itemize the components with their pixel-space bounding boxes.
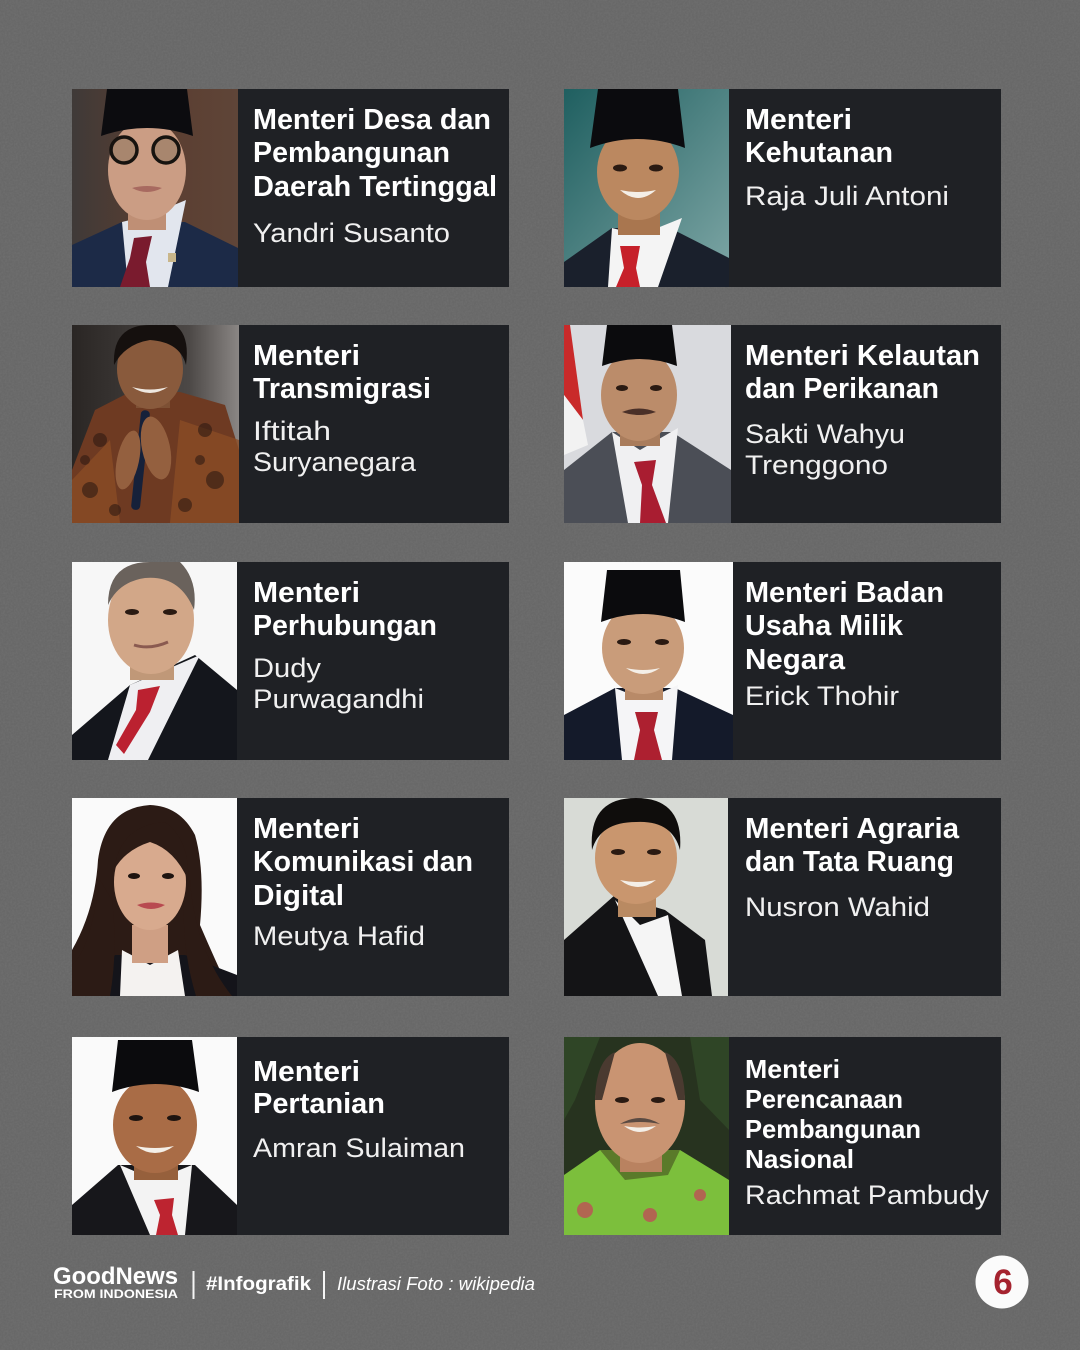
name: Amran Sulaiman	[253, 1133, 465, 1163]
heading: dan Tata Ruang	[745, 846, 954, 878]
heading	[253, 577, 437, 642]
name: Dudy	[253, 653, 322, 683]
heading	[745, 104, 893, 169]
logo: GoodNews from Indonesia: FROM INDONESIA	[54, 1287, 178, 1301]
heading: Menteri	[745, 1054, 840, 1084]
photo credit: Ilustrasi Foto : wikipedia	[337, 1274, 535, 1294]
heading	[253, 813, 473, 912]
heading	[253, 1056, 385, 1120]
heading: Kehutanan	[745, 137, 893, 169]
portrait: Raja Juli Antoni	[564, 89, 729, 287]
name: Sakti Wahyu	[745, 419, 905, 449]
hashtag: #Infografik	[206, 1274, 311, 1295]
heading: Menteri	[253, 1056, 360, 1088]
name: Iftitah	[253, 416, 331, 446]
card: Menteri Badan Usaha Milik Negara	[564, 562, 1001, 760]
name: Trenggono	[745, 450, 888, 480]
name: Erick Thohir	[745, 681, 899, 711]
name: Meutya Hafid	[253, 921, 425, 951]
portrait: Erick Thohir	[564, 562, 733, 760]
name: Nusron Wahid	[745, 892, 930, 922]
heading: Digital	[253, 880, 344, 912]
portrait: Sakti Wahyu Trenggono	[564, 325, 731, 523]
card: Menteri Komunikasi dan Digital	[72, 798, 509, 996]
heading: Menteri	[253, 340, 360, 372]
card: Menteri Perencanaan Pembangunan Nasional	[564, 1037, 1001, 1235]
heading: Menteri	[253, 813, 360, 845]
card: Menteri Perhubungan	[72, 562, 509, 760]
logo: GoodNews from Indonesia: GoodNews	[53, 1263, 178, 1290]
heading: Komunikasi dan	[253, 846, 473, 878]
heading: Daerah Tertinggal	[253, 171, 497, 203]
name	[745, 419, 905, 480]
heading: Perencanaan	[745, 1084, 903, 1114]
card: Menteri Agraria dan Tata Ruang	[564, 798, 1001, 996]
heading	[745, 813, 960, 878]
heading: Menteri Agraria	[745, 813, 960, 845]
heading	[253, 104, 497, 203]
heading: Negara	[745, 644, 846, 676]
name: Yandri Susanto	[253, 218, 450, 248]
name: Purwagandhi	[253, 684, 424, 714]
heading: Menteri	[253, 577, 360, 609]
heading: Menteri Desa dan	[253, 104, 491, 136]
heading: Usaha Milik	[745, 610, 904, 642]
card: Menteri Kehutanan	[564, 89, 1001, 287]
portrait: Amran Sulaiman	[72, 1037, 237, 1235]
page number badge: 6	[993, 1263, 1013, 1302]
name	[253, 653, 424, 714]
portrait: Meutya Hafid	[72, 798, 237, 996]
page number badge	[976, 1256, 1028, 1308]
heading	[745, 1054, 921, 1174]
heading: Perhubungan	[253, 610, 437, 642]
card: Menteri Desa dan Pembangunan Daerah Tertinggal	[72, 89, 509, 287]
card: Menteri Pertanian	[72, 1037, 509, 1235]
heading: dan Perikanan	[745, 373, 939, 405]
heading: Pembangunan	[253, 137, 450, 169]
footer	[53, 1263, 535, 1301]
name	[253, 416, 417, 477]
heading: Nasional	[745, 1144, 854, 1174]
heading: Pembangunan	[745, 1114, 921, 1144]
heading	[253, 340, 431, 405]
name: Suryanegara	[253, 447, 417, 477]
portrait: Iftitah Suryanegara	[72, 325, 239, 523]
heading	[745, 577, 944, 676]
heading	[745, 340, 980, 405]
name: Rachmat Pambudy	[745, 1180, 990, 1210]
card: Menteri Kelautan dan Perikanan	[564, 325, 1001, 523]
portrait: Yandri Susanto	[72, 89, 238, 287]
card: Menteri Transmigrasi	[72, 325, 509, 523]
heading: Transmigrasi	[253, 373, 431, 405]
heading: Menteri Badan	[745, 577, 944, 609]
portrait: Rachmat Pambudy	[564, 1037, 729, 1235]
name: Raja Juli Antoni	[745, 181, 949, 211]
heading: Menteri	[745, 104, 852, 136]
portrait: Nusron Wahid	[564, 798, 728, 996]
heading: Menteri Kelautan	[745, 340, 980, 372]
portrait: Dudy Purwagandhi	[72, 562, 237, 760]
heading: Pertanian	[253, 1088, 385, 1120]
